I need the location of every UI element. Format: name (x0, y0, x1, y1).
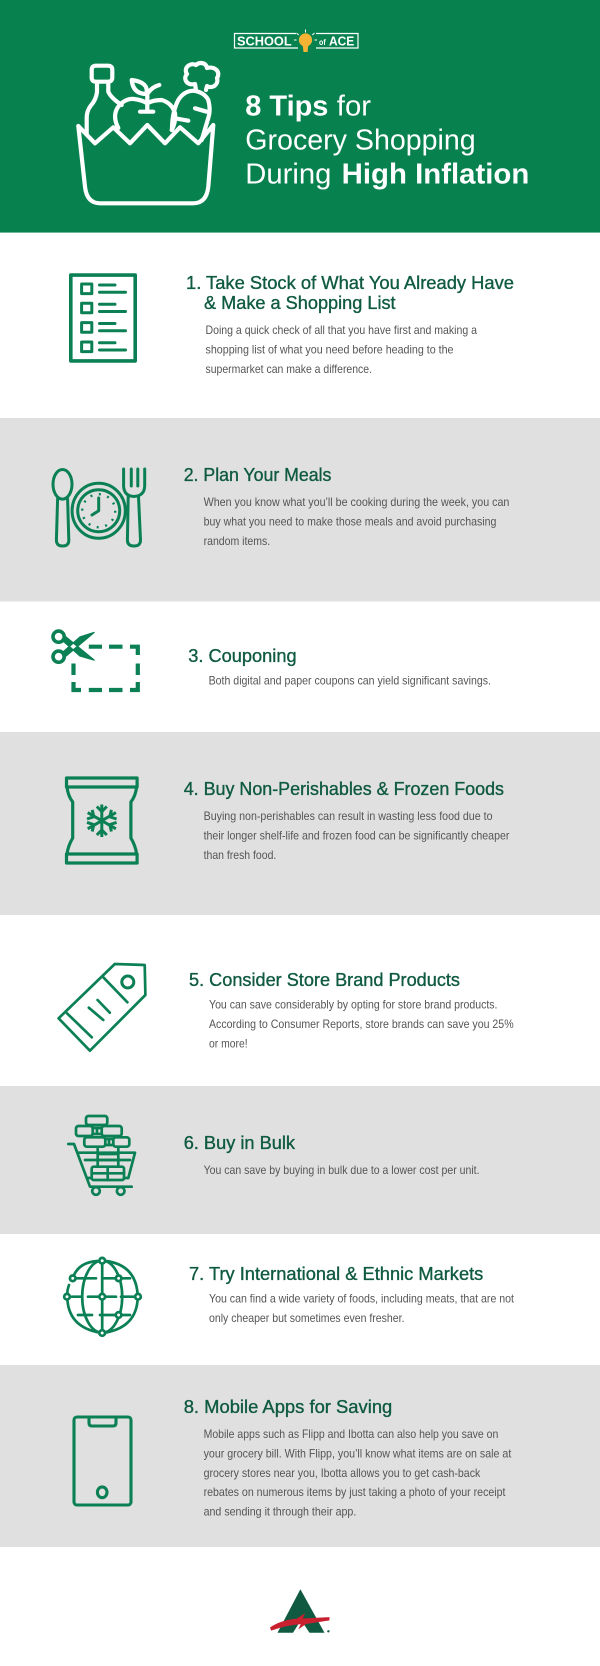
body text: According to Consumer Reports, store brands can save you 25% (209, 1017, 514, 1031)
body text: their longer shelf-life and frozen food can be significantly cheaper (204, 828, 509, 842)
body text: supermarket can make a difference. (206, 362, 372, 376)
body text: You can save considerably by opting for store brand products. (209, 998, 498, 1012)
logo: Ace footer mark (271, 1589, 330, 1633)
title: Grocery Shopping (245, 125, 476, 157)
body text: grocery stores near you, Ibotta allows you to get cash-back (204, 1466, 481, 1480)
body text (204, 809, 509, 862)
body text: shopping list of what you need before heading to the (206, 342, 454, 356)
logo: School of Ace: SCHOOL (237, 33, 292, 48)
logo: School of Ace (234, 30, 358, 52)
title: High Inflation (342, 159, 529, 191)
icon: frozen food bag (66, 778, 137, 863)
body text: You can find a wide variety of foods, including meats, that are not (209, 1292, 515, 1306)
panel: tip 4 (0, 732, 600, 915)
title: During (245, 159, 331, 191)
panel: tip 5 (0, 915, 600, 1086)
body text: and sending it through their app. (204, 1505, 356, 1519)
heading: 5. Consider Store Brand Products (189, 969, 460, 990)
heading: 1. Take Stock of What You Already Have (186, 272, 514, 293)
panel: tip 1 (0, 233, 600, 418)
icon: price tag (59, 964, 145, 1051)
body text: Both digital and paper coupons can yield significant savings. (209, 674, 491, 688)
body text (206, 323, 477, 376)
icon: scissors and coupon (53, 631, 138, 690)
body text: rebates on numerous items by just taking a photo of your receipt (204, 1485, 506, 1499)
body text: When you know what you’ll be cooking during the week, you can (204, 495, 509, 509)
body text: Buying non-perishables can result in wasting less food due to (204, 809, 493, 823)
body text (209, 998, 514, 1050)
panel: tip 7 (0, 1234, 600, 1365)
body text: only cheaper but sometimes even fresher. (209, 1311, 404, 1325)
icon: grocery basket (78, 63, 218, 203)
heading: & Make a Shopping List (204, 292, 396, 313)
body text (204, 495, 509, 548)
heading: 3. Couponing (188, 645, 297, 666)
body text: random items. (204, 534, 270, 548)
panel: tip 3 (0, 602, 600, 732)
body text (204, 1427, 512, 1519)
body text: Doing a quick check of all that you have first and making a (206, 323, 477, 337)
panel: tip 6 (0, 1086, 600, 1234)
heading: 6. Buy in Bulk (184, 1132, 296, 1153)
heading: 2. Plan Your Meals (184, 464, 331, 485)
heading (186, 272, 514, 313)
body text: Mobile apps such as Flipp and Ibotta can also help you save on (204, 1427, 498, 1441)
body text: or more! (209, 1036, 248, 1050)
title: for (337, 91, 371, 123)
icon: plate and cutlery (53, 469, 145, 546)
logo: School of Ace: of (319, 38, 326, 47)
panel: tip 2 (0, 418, 600, 602)
heading: 7. Try International & Ethnic Markets (189, 1263, 483, 1284)
body text: than fresh food. (204, 848, 276, 862)
body text (209, 1292, 515, 1325)
body text: buy what you need to make those meals and avoid purchasing (204, 514, 496, 528)
title (245, 91, 529, 191)
icon: shopping cart with bulk goods (68, 1116, 135, 1195)
logo: School of Ace: ACE (329, 33, 355, 48)
title: 8 Tips (245, 91, 328, 123)
icon: globe network (64, 1258, 141, 1336)
heading: 4. Buy Non-Perishables & Frozen Foods (184, 778, 504, 799)
icon: smartphone (74, 1417, 131, 1505)
heading: 8. Mobile Apps for Saving (184, 1396, 392, 1417)
icon: checklist (71, 275, 135, 361)
body text: your grocery bill. With Flipp, you’ll know what items are on sale at (204, 1446, 512, 1460)
body text: You can save by buying in bulk due to a lower cost per unit. (204, 1163, 480, 1177)
panel: header (0, 0, 600, 233)
panel: tip 8 (0, 1365, 600, 1547)
